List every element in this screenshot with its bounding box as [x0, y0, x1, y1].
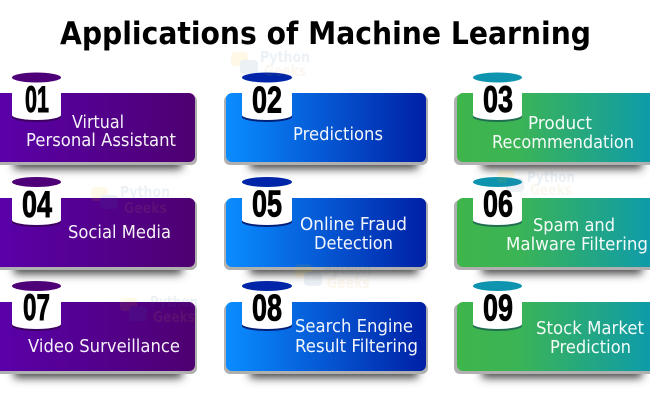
card 02: Predictions: 02 — [252, 80, 282, 120]
card 08: Search Engine Result Filtering — [224, 281, 428, 378]
card 03: Product Recommendation — [454, 72, 650, 169]
card 02: Predictions: Predictions — [293, 124, 383, 145]
watermark: Python Geeks top centre: Geeks — [264, 62, 306, 80]
card 04: Social Media: 04 — [22, 184, 52, 225]
watermark: Python Geeks row 2 right: Geeks — [530, 181, 572, 199]
watermark: Python Geeks row 2 right: Python — [527, 168, 575, 186]
card 03: Product Recommendation: 03 — [483, 79, 513, 120]
card 04: Social Media — [0, 177, 197, 274]
title: Applications of Machine Learning — [60, 16, 591, 52]
card 01: Virtual Personal Assistant: Virtual — [72, 112, 124, 133]
card 06: Spam and Malware Filtering: Spam and — [533, 215, 615, 236]
watermark: Python Geeks row 3 centre: Geeks — [327, 274, 370, 292]
watermark: Python Geeks row 2 left — [91, 183, 170, 217]
card 09: Stock Market Prediction: 09 — [483, 288, 513, 328]
watermark: Python Geeks top centre: Python — [260, 48, 310, 66]
card 03: Product Recommendation: Product — [528, 113, 592, 134]
card 05: Online Fraud Detection: Online Fraud — [300, 214, 407, 235]
watermark: Python Geeks row 3 left: Python — [150, 293, 198, 311]
card 09: Stock Market Prediction — [454, 281, 650, 378]
card 06: Spam and Malware Filtering: 06 — [483, 184, 513, 224]
card 08: Search Engine Result Filtering: Search Engine — [295, 316, 413, 337]
card 01: Virtual Personal Assistant: 01 — [25, 79, 49, 120]
watermark: Python Geeks row 2 right — [497, 168, 575, 199]
watermark: Python Geeks top centre — [231, 48, 310, 80]
watermark: Python Geeks row 3 left — [120, 293, 198, 326]
watermark: Python Geeks row 2 left: Python — [120, 183, 170, 201]
card 06: Spam and Malware Filtering — [454, 177, 650, 274]
watermark: Python Geeks row 3 centre: Python — [323, 260, 371, 278]
card 09: Stock Market Prediction: Prediction — [550, 337, 631, 358]
watermark: Python Geeks row 3 centre — [295, 260, 371, 292]
card 03: Product Recommendation: Recommendation — [492, 132, 634, 153]
card 05: Online Fraud Detection: 05 — [252, 184, 282, 224]
card 04: Social Media: Social Media — [68, 222, 171, 243]
card 07: Video Surveillance: Video Surveillance — [28, 336, 180, 357]
watermark: Python Geeks row 3 left: Geeks — [153, 308, 195, 326]
card 09: Stock Market Prediction: Stock Market — [536, 318, 644, 339]
card 02: Predictions — [224, 72, 428, 169]
card 07: Video Surveillance: 07 — [23, 287, 50, 328]
card 08: Search Engine Result Filtering: Result Filtering — [295, 336, 418, 357]
card 07: Video Surveillance — [0, 281, 197, 378]
card 01: Virtual Personal Assistant: Personal Assistant — [26, 130, 176, 151]
card 01: Virtual Personal Assistant — [0, 72, 197, 169]
card 05: Online Fraud Detection: Detection — [314, 233, 393, 254]
card 05: Online Fraud Detection — [224, 177, 428, 274]
card 08: Search Engine Result Filtering: 08 — [252, 288, 282, 328]
watermark: Python Geeks row 2 left: Geeks — [124, 199, 167, 217]
